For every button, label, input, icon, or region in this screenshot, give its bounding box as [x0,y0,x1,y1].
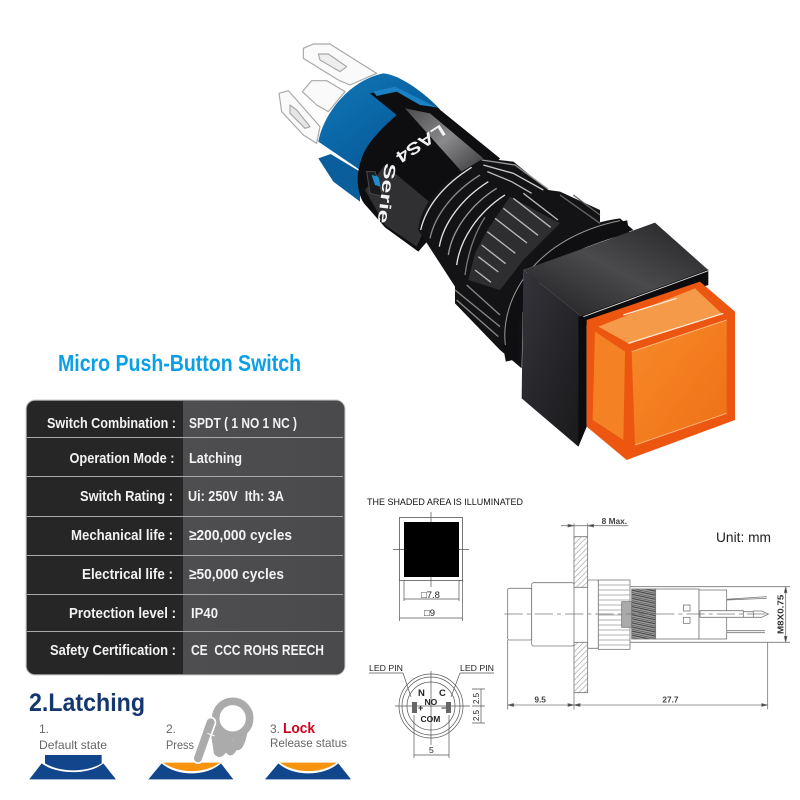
pin markings: N [418,688,425,699]
flange and nut [588,580,632,649]
collar ring [505,221,628,360]
outline lines and centre line [630,587,790,642]
lens left facet [593,332,625,440]
step 3: lock [265,720,351,779]
pin markings: + [418,703,423,713]
barrel lettering Serie: Serie [374,162,398,225]
knurl ribs [455,193,600,337]
lens upper band [598,288,722,343]
thread highlights [421,160,548,275]
barrel lettering LAS4: LAS4 [392,121,449,167]
spec labels [47,415,176,659]
spec labels: Operation Mode : [70,450,174,467]
panel cross-section [574,537,588,693]
panel: specification table [26,400,345,675]
shaded square [404,522,459,577]
spec values: IP40 [191,605,218,622]
orange lens [587,282,735,460]
diagram caption: THE SHADED AREA IS ILLUMINATED [367,497,523,507]
spec labels: Safety Certification : [50,642,176,659]
diagram: pin layout [369,663,494,758]
unit label: Unit: mm [716,529,771,545]
housing side face [522,270,587,447]
spec labels: Switch Rating : [80,488,173,505]
LED PIN right label: LED PIN [460,663,494,673]
icon: pressing hand [198,701,250,758]
spec values: Ui: 250V Ith: 3A [188,488,284,505]
pin markings: NO [424,697,438,707]
LED PIN left label: LED PIN [369,663,403,673]
blue rear cap [318,73,440,170]
product photo: push-button switch [279,44,735,460]
step 1 caption: 1. [39,722,49,736]
step 3 caption: Release status [270,736,347,750]
spec labels: Switch Combination : [47,415,176,432]
lock label: Lock [283,720,316,737]
dimension: 9.5: 9.5 [534,695,546,705]
terminals [700,597,768,633]
dimension 5: 5 [429,745,434,755]
black barrel [358,88,500,252]
button [508,583,574,646]
dimension lines [508,523,787,709]
switch housing [522,223,708,447]
spec values: SPDT ( 1 NO 1 NC ) [189,415,297,432]
threaded section [632,589,656,639]
barrel lower shading [365,165,435,247]
step 3 caption: 3. [270,722,280,736]
lower blue tab [318,154,360,202]
step 3 diagram [265,763,351,779]
step 1 diagram [29,755,116,779]
pin markings: − [441,703,446,713]
dimension: 8 Max: 8 Max. [602,516,627,526]
title: Micro Push-Button Switch [58,350,301,376]
spec values [188,415,324,659]
step 2 caption: 2. [166,722,176,736]
barrel highlight [405,108,483,172]
spec values: ≥200,000 cycles [189,527,292,544]
dimension 2.5 upper: 2.5 [472,692,481,704]
spec labels: Protection level : [69,605,176,622]
blue window detail [367,172,383,197]
step 2 caption: Press [166,738,194,752]
pin markings: COM [420,714,440,724]
step 1 caption: Default state [39,738,107,752]
housing front rim [578,269,708,447]
spec labels: Mechanical life : [71,527,173,544]
spec values: Latching [189,450,242,467]
dark mass behind collar [500,218,633,368]
terminal pins [279,44,377,143]
dimension 2.5 lower: 2.5 [472,709,481,721]
rear body [656,589,727,639]
dimension: 27.7: 27.7 [662,695,679,705]
step 2: press [148,701,250,779]
diagram: side view with dimensions [504,516,790,709]
rear of switch: pins, cap and barrel [279,44,633,368]
step 2 diagram [148,763,233,779]
pin markings [418,688,446,724]
threaded section and knurled nut [418,158,600,350]
housing top face [523,223,708,317]
lens front face [632,320,727,445]
spec values: CE CCC ROHS REECH [191,642,324,659]
dimension 9: □9 [424,608,435,619]
step 1: default state [29,722,116,779]
dimension 7.8: □7.8 [421,590,440,601]
dimension: M8X0.75: M8X0.75 [776,594,786,634]
spec values: ≥50,000 cycles [189,566,284,583]
heading: latching: 2.Latching [29,689,145,717]
spec labels: Electrical life : [82,566,173,583]
pin markings: C [439,688,446,699]
diagram: illuminated area [367,497,523,621]
